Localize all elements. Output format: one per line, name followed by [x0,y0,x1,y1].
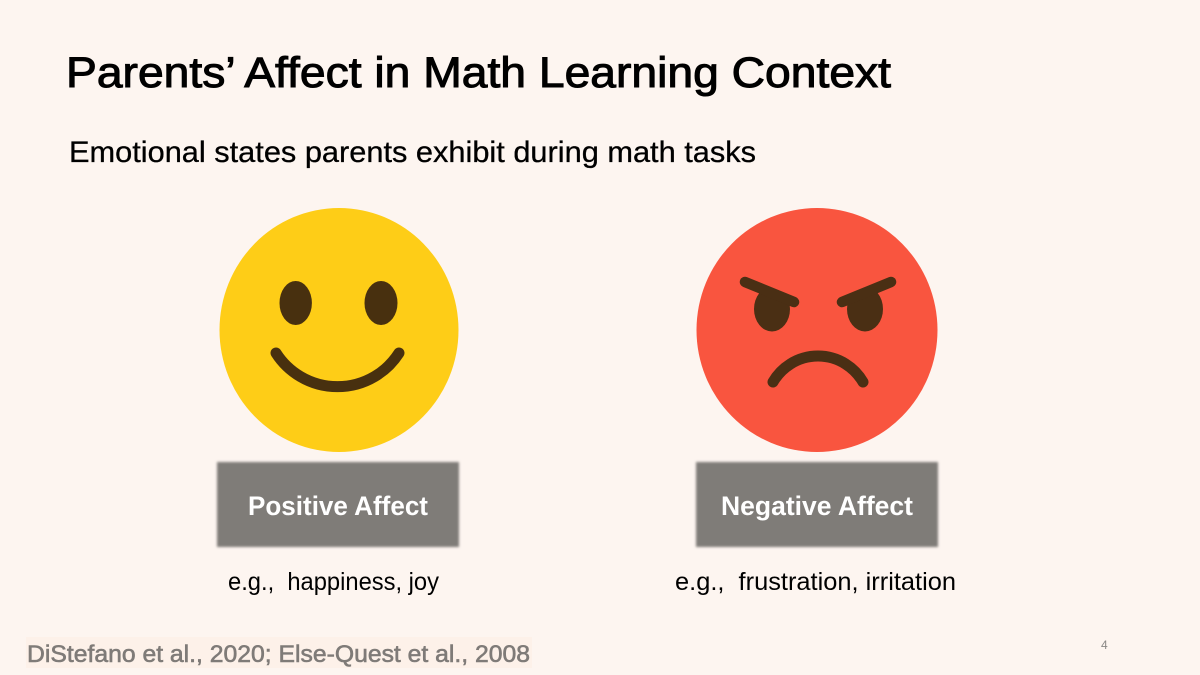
subtitle: Emotional states parents exhibit during math tasks [69,136,756,169]
label box: positive affect: Positive Affect [248,491,428,521]
icon: smiling face [220,208,458,452]
label box: negative affect [696,462,938,547]
panel: positive affect [217,208,459,596]
label box: negative affect: Negative Affect [721,491,913,521]
citation: DiStefano et al., 2020; Else-Quest et al., 2008 [27,641,530,668]
examples: positive affect: e.g., happiness, joy [228,568,439,596]
panel: negative affect [675,208,956,596]
examples: negative affect: e.g., frustration, irritation [675,568,956,596]
icon: angry face [696,208,938,452]
title: Parents’ Affect in Math Learning Context [66,49,891,97]
label box: positive affect [217,462,459,547]
page number: 4 [1101,638,1108,652]
